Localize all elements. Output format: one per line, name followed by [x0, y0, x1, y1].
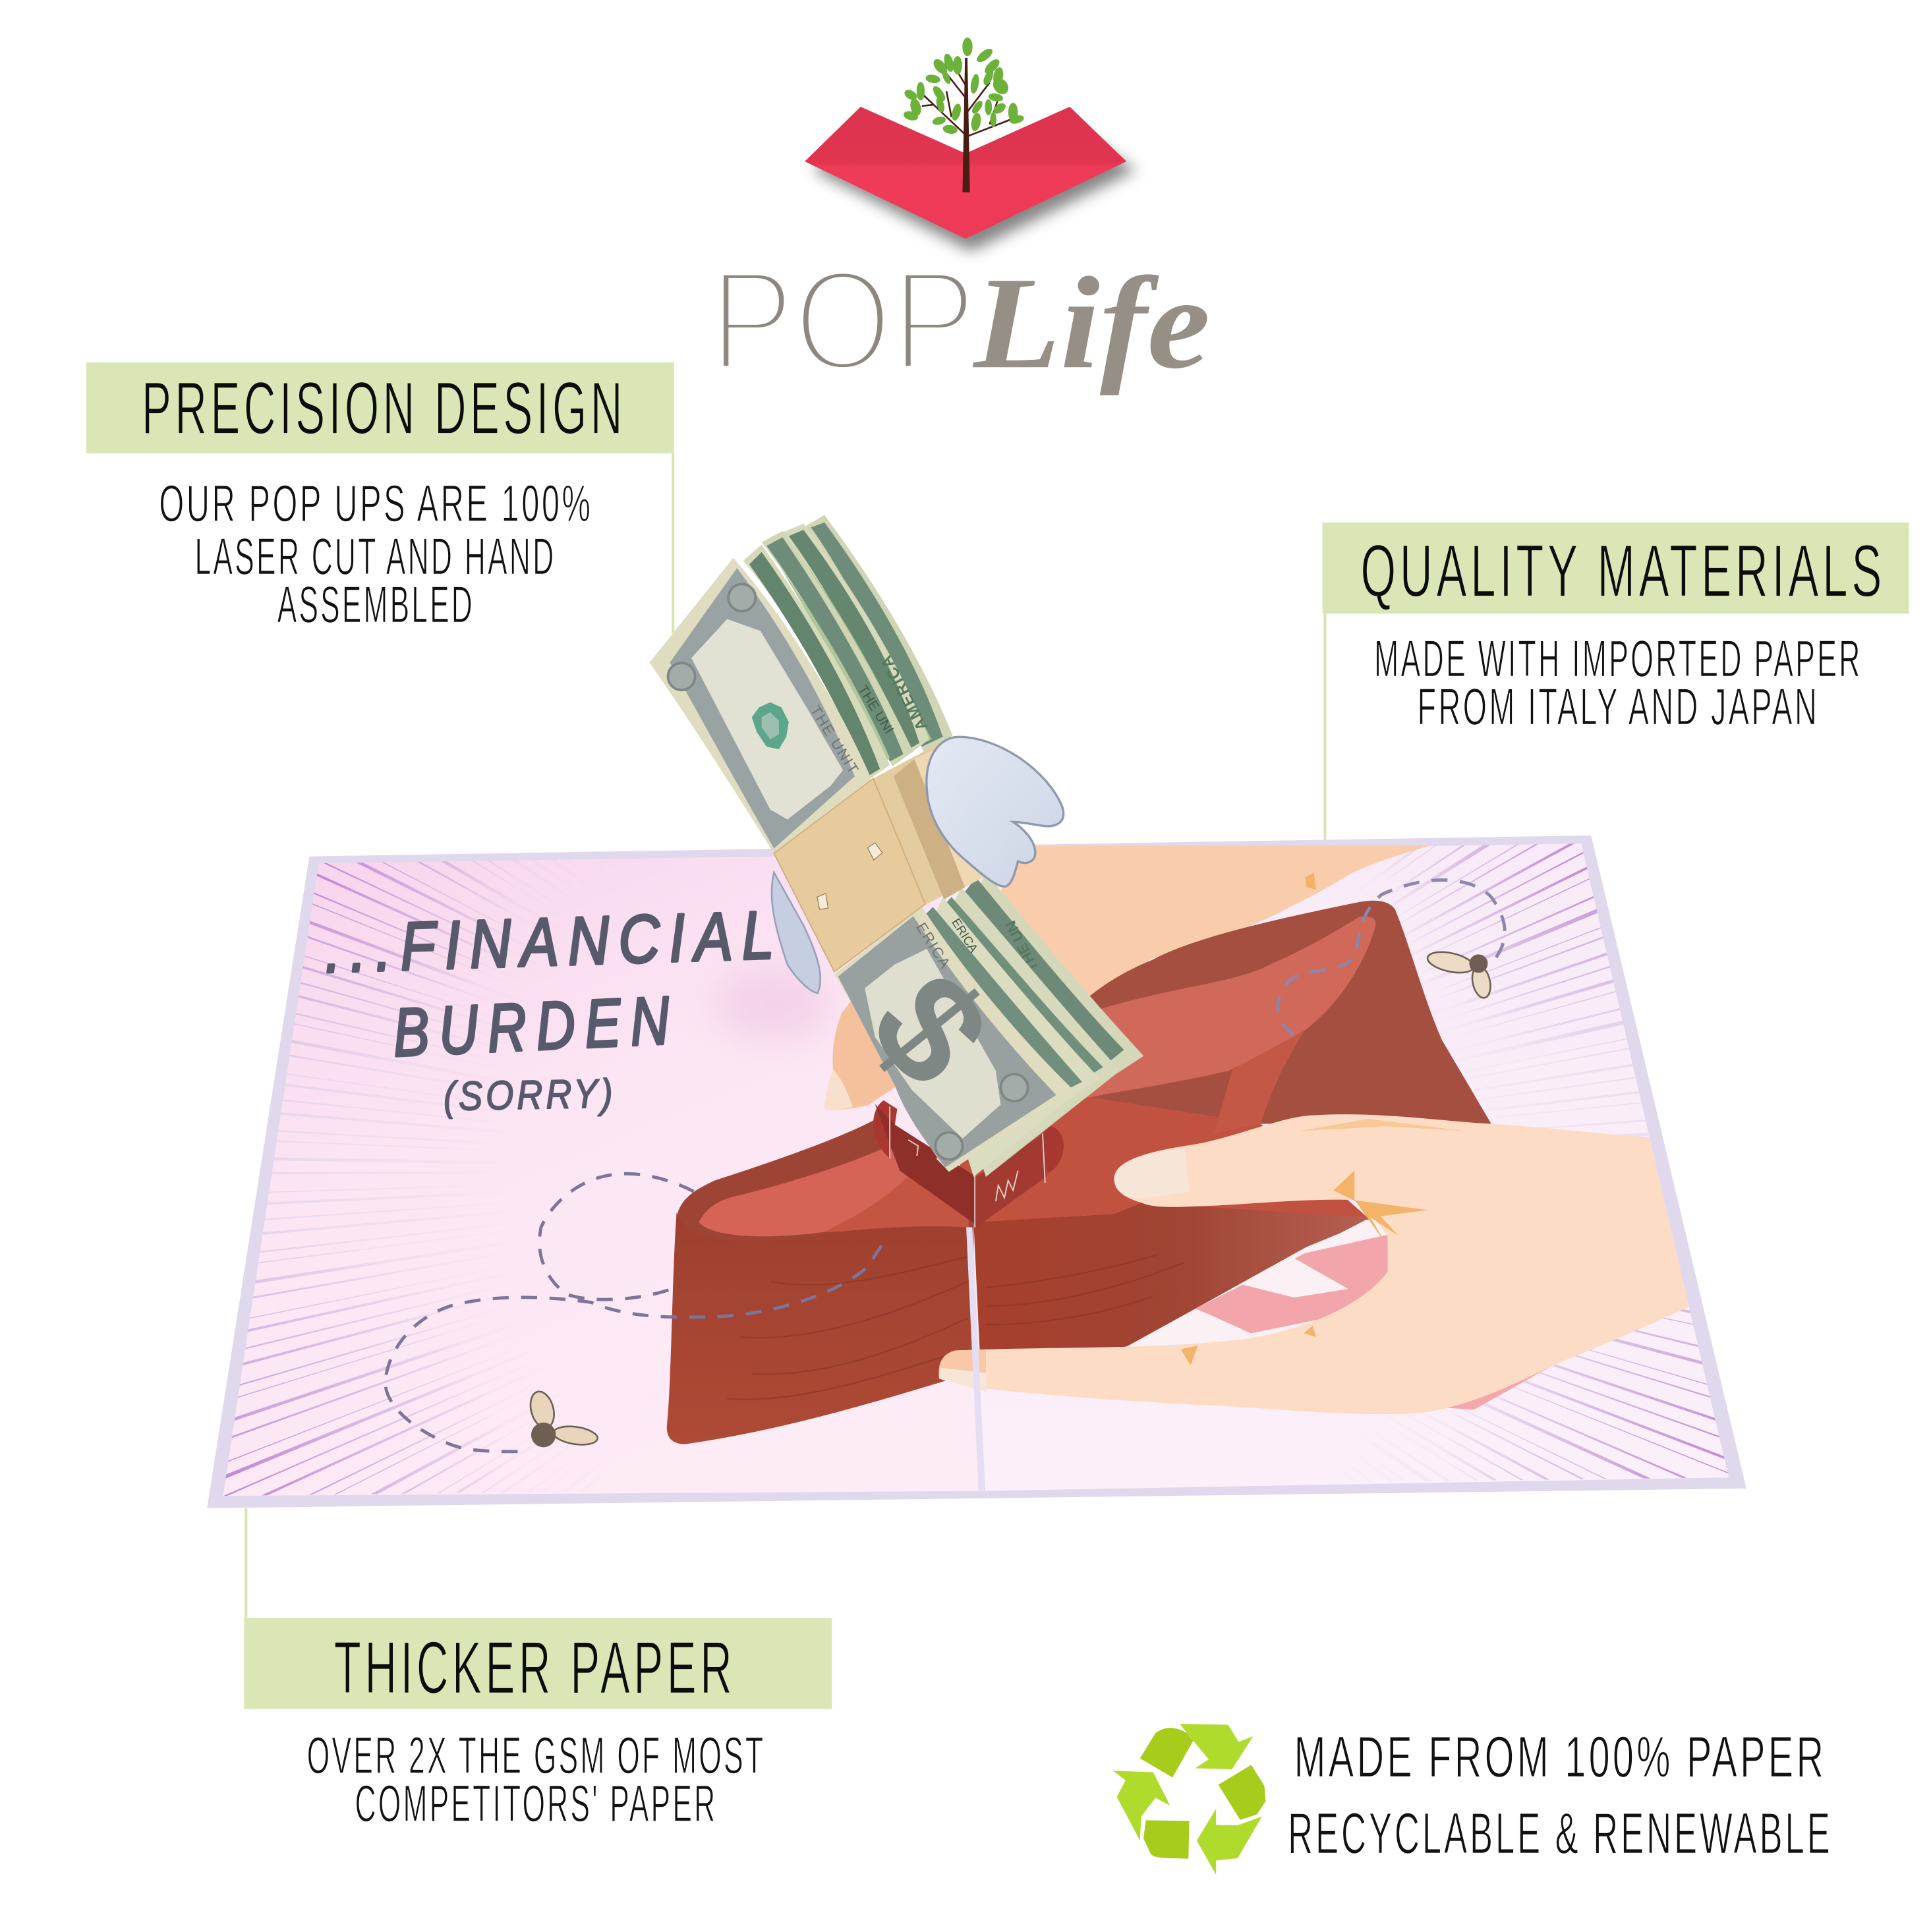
callout: quality materials	[1323, 523, 1909, 840]
text: precision design description: LASER CUT AND HAND	[194, 527, 556, 585]
logo wordmark: Life	[972, 250, 1210, 396]
wallet back panel	[1085, 901, 1491, 1123]
logo wordmark: POP	[710, 241, 976, 400]
upper back bills: THE UNI	[855, 683, 896, 737]
pop-up base	[873, 1100, 1064, 1228]
upper back bills: AMERICA	[877, 652, 931, 733]
text: recyclable statement	[1288, 1724, 1833, 1865]
fly: left	[527, 1389, 598, 1447]
front bill: top half: THE UNIT	[807, 703, 862, 778]
lower back bills	[909, 872, 1143, 1177]
card border	[207, 836, 1746, 1508]
wallet left dark strip	[677, 1118, 973, 1269]
pop-up money stack	[649, 515, 1143, 1177]
wallet	[667, 901, 1491, 1444]
lower back bills: THE UN	[1002, 918, 1042, 975]
right wing	[927, 737, 1064, 886]
text: precision design description	[159, 474, 592, 633]
pop-up card	[207, 836, 1746, 1508]
logo book icon	[805, 107, 1136, 251]
card message text: BURDEN	[391, 982, 681, 1071]
paper band	[774, 737, 1000, 972]
speed lines	[555, 752, 1393, 1589]
card message text: ...FINANCIAL	[324, 897, 784, 986]
callout: thicker paper	[244, 1508, 832, 1833]
text: thicker paper description: COMPETITORS' PAPER	[355, 1775, 717, 1833]
fold line	[966, 1228, 985, 1491]
bill seal	[752, 702, 789, 749]
front bill: top half	[649, 558, 871, 853]
left page	[223, 854, 982, 1496]
hand: fingers and palm	[939, 1114, 1694, 1414]
lower back bills: ERICA	[949, 916, 981, 955]
hand: upper fingers behind wallet	[986, 845, 1431, 1000]
text: precision design description: ASSEMBLED	[277, 575, 475, 633]
card message text: (SORRY)	[443, 1071, 616, 1120]
logo tree	[904, 38, 1024, 192]
wallet wrinkles	[727, 1255, 1183, 1400]
text: thicker paper description: OVER 2X THE GSM OF MOST	[307, 1726, 765, 1784]
wallet inner tongue	[1041, 917, 1375, 1115]
fly: right	[1426, 948, 1493, 1000]
pink lining	[1124, 1214, 1575, 1409]
wallet left inner	[699, 1143, 969, 1236]
text: precision design description: OUR POP UPS ARE 100%	[159, 474, 592, 532]
fly trails	[386, 880, 1505, 1452]
logo: Pop Life	[710, 38, 1210, 400]
heading bar: thicker paper	[244, 1618, 832, 1709]
callout: precision design	[86, 362, 674, 633]
text: quality materials description	[1374, 630, 1862, 736]
upper back bills	[743, 515, 953, 779]
front bill: bottom half: ERICA	[913, 920, 954, 972]
heading bar: thicker paper: THICKER PAPER	[334, 1626, 735, 1709]
hand: palm left of the bills	[824, 986, 900, 1110]
finger nails	[939, 1149, 1190, 1392]
heading bar: precision design: PRECISION DESIGN	[142, 366, 626, 449]
wallet right front	[973, 1203, 1370, 1351]
text: thicker paper description	[307, 1726, 765, 1833]
heading bar: precision design	[86, 362, 674, 453]
right page	[937, 843, 1729, 1491]
skin crease marks	[1180, 872, 1466, 1365]
left wing	[772, 872, 821, 993]
card message text	[324, 897, 784, 1120]
front bill: bottom half: $	[838, 942, 1023, 1116]
wallet lower middle	[949, 1023, 1370, 1222]
icon: recycling arrows	[1113, 1724, 1265, 1875]
logo wordmark	[710, 241, 1210, 400]
wallet left front	[667, 1212, 980, 1444]
front bill: bottom half	[834, 907, 1074, 1172]
